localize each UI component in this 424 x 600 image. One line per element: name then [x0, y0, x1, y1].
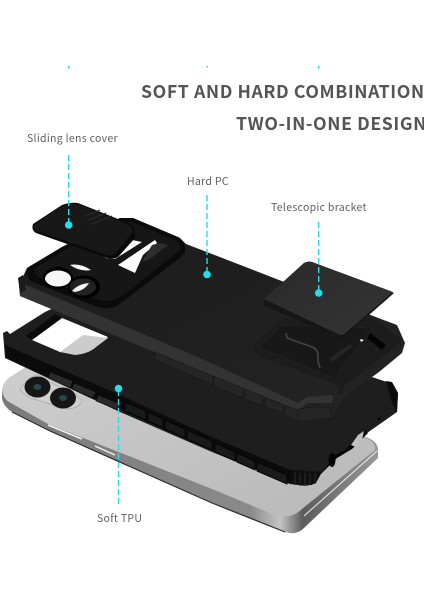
bracket base: [253, 318, 403, 396]
lens ring large: [43, 267, 73, 289]
pointer: hard PC: [203, 195, 211, 278]
camera plate: [27, 218, 185, 308]
grip segments: [125, 402, 287, 484]
shell tabs: [155, 352, 332, 422]
label: soft TPU: [97, 385, 142, 526]
flash slit: [70, 265, 91, 270]
label: telescopic bracket: [271, 200, 367, 297]
phone: [2, 340, 378, 533]
label: hard PC: Hard PC: [187, 174, 229, 189]
window opening: [32, 318, 108, 354]
side buttons: [48, 372, 120, 410]
label: telescopic bracket: Telescopic bracket: [271, 200, 367, 215]
hard PC notch: [18, 275, 26, 293]
corner ribs: [290, 470, 322, 486]
pointer: sliding lens cover: [65, 155, 72, 229]
right cut-outs: [321, 430, 368, 474]
sliding lens cover: [32, 203, 135, 259]
title: [141, 78, 424, 136]
pointer: telescopic bracket: [315, 222, 323, 297]
label: sliding lens cover: Sliding lens cover: [27, 131, 118, 146]
pointer: soft TPU: [115, 385, 122, 505]
top dash ticks: [68, 66, 320, 68]
bracket top plate: [263, 262, 394, 338]
title: TWO-IN-ONE DESIGN: [236, 110, 424, 136]
label: hard PC: [187, 174, 229, 278]
title: SOFT AND HARD COMBINATION: [141, 78, 424, 104]
lens ring small: [68, 276, 100, 298]
shell side strip: [19, 282, 333, 410]
label: soft TPU: Soft TPU: [97, 511, 142, 526]
phone camera module: [20, 375, 82, 409]
layer: hard PC shell: [18, 218, 405, 422]
layer: soft TPU case: [3, 305, 398, 486]
telescopic bracket: [253, 262, 403, 396]
label: sliding lens cover: [27, 131, 118, 229]
window cut-outs in the plate: [105, 240, 142, 259]
